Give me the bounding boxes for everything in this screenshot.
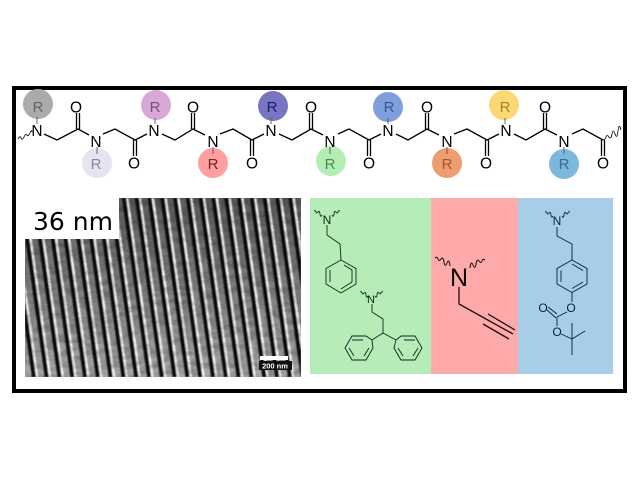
backbone atoms: nitrogen and oxygen: O: [305, 100, 317, 116]
peptoid backbone: [18, 113, 621, 156]
R labels: [33, 99, 570, 173]
R labels: R: [442, 156, 453, 173]
backbone atoms: nitrogen and oxygen: O: [480, 156, 492, 172]
R labels: R: [150, 99, 161, 116]
backbone atoms: nitrogen and oxygen: N: [207, 134, 219, 151]
backbone atoms: nitrogen and oxygen: O: [539, 100, 551, 116]
backbone atoms: nitrogen and oxygen: N: [265, 123, 277, 140]
panel: blue Boc-tyramine side chain: O: [566, 301, 576, 315]
panel: blue Boc-tyramine side chain: N: [553, 214, 561, 228]
panel: green phenethyl side chains: [310, 198, 431, 374]
scale bar: [259, 356, 292, 370]
R group circles: [23, 89, 579, 179]
panel: red propargyl side chain: N: [450, 264, 468, 292]
backbone atoms: nitrogen and oxygen: O: [363, 156, 375, 172]
R labels: R: [208, 156, 219, 173]
R labels: R: [91, 156, 102, 173]
backbone atoms: nitrogen and oxygen: N: [324, 134, 336, 151]
label: 36 nm: [25, 197, 119, 239]
panel: green phenethyl side chains: N: [323, 213, 331, 227]
backbone atoms: nitrogen and oxygen: N: [31, 123, 43, 140]
backbone atoms: nitrogen and oxygen: N: [500, 123, 512, 140]
backbone atoms: nitrogen and oxygen: N: [558, 134, 570, 151]
panel: red propargyl side chain: [431, 198, 518, 374]
backbone atoms: nitrogen and oxygen: N: [90, 134, 102, 151]
R labels: R: [500, 99, 511, 116]
panel: blue Boc-tyramine side chain: O: [552, 325, 562, 339]
backbone atoms: nitrogen and oxygen: O: [421, 100, 433, 116]
backbone atoms: nitrogen and oxygen: [31, 100, 609, 172]
backbone atoms: nitrogen and oxygen: N: [441, 134, 453, 151]
backbone atoms: nitrogen and oxygen: O: [597, 156, 609, 172]
R labels: R: [325, 156, 336, 173]
R labels: R: [33, 99, 44, 116]
TEM micrograph: [25, 198, 301, 377]
outer frame: [14, 88, 625, 391]
label: 36 nm: 36 nm: [33, 207, 113, 236]
backbone atoms: nitrogen and oxygen: N: [148, 123, 160, 140]
panel: blue Boc-tyramine side chain: O: [538, 301, 548, 315]
panel: blue Boc-tyramine side chain: [518, 198, 613, 374]
scale bar: 200 nm: [262, 362, 288, 370]
R labels: R: [559, 156, 570, 173]
R labels: R: [267, 99, 278, 116]
R labels: R: [384, 99, 395, 116]
backbone atoms: nitrogen and oxygen: N: [382, 123, 394, 140]
backbone atoms: nitrogen and oxygen: O: [187, 100, 199, 116]
backbone atoms: nitrogen and oxygen: O: [70, 100, 82, 116]
backbone atoms: nitrogen and oxygen: O: [246, 156, 258, 172]
panel: green phenethyl side chains: N: [367, 294, 375, 306]
backbone atoms: nitrogen and oxygen: O: [128, 156, 140, 172]
